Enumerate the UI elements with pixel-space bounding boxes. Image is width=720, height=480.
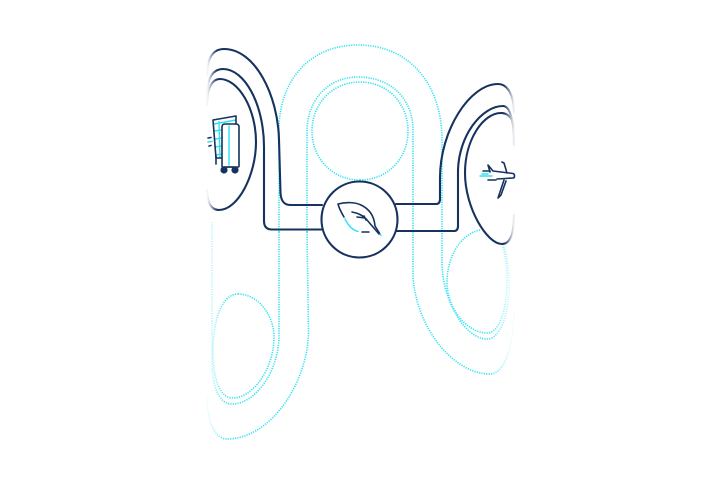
bottom-left: long dotted route bbox=[207, 232, 309, 439]
leaf outline bbox=[338, 203, 380, 234]
back case grid bbox=[214, 120, 236, 165]
top arch: outer dotted route bbox=[279, 45, 509, 339]
bottom-left: middle dotted route bbox=[212, 222, 279, 404]
left middle navy route bbox=[207, 69, 322, 230]
leaf lower dash bbox=[362, 231, 369, 233]
icon: luggage bbox=[208, 116, 239, 173]
leaf veins bbox=[352, 212, 379, 234]
navy routes: right bbox=[396, 84, 514, 244]
speed lines bbox=[483, 171, 496, 180]
top arch: middle dotted route bbox=[307, 77, 514, 374]
top circle: inner dotted loop bbox=[312, 82, 408, 180]
central circle bbox=[322, 182, 398, 258]
icon: leaf bbox=[338, 203, 381, 236]
left capsule bbox=[207, 79, 256, 210]
front case bbox=[222, 124, 239, 167]
leaf cyan edge bbox=[345, 219, 381, 236]
fuselage and wings bbox=[488, 162, 514, 198]
right outer navy route bbox=[396, 84, 514, 204]
left outer navy route bbox=[207, 49, 322, 205]
bottom-left: inner dotted loop bbox=[213, 294, 274, 398]
icon: airplane bbox=[480, 162, 514, 198]
speed lines bbox=[208, 138, 211, 146]
wheels bbox=[216, 156, 238, 173]
dotted cyan routes bbox=[207, 45, 514, 439]
right capsule bbox=[465, 113, 514, 244]
back case outline bbox=[213, 116, 236, 158]
bottom-right: inner dotted loop bbox=[447, 230, 507, 333]
navy routes: left bbox=[207, 49, 322, 230]
right middle navy route bbox=[396, 106, 514, 231]
